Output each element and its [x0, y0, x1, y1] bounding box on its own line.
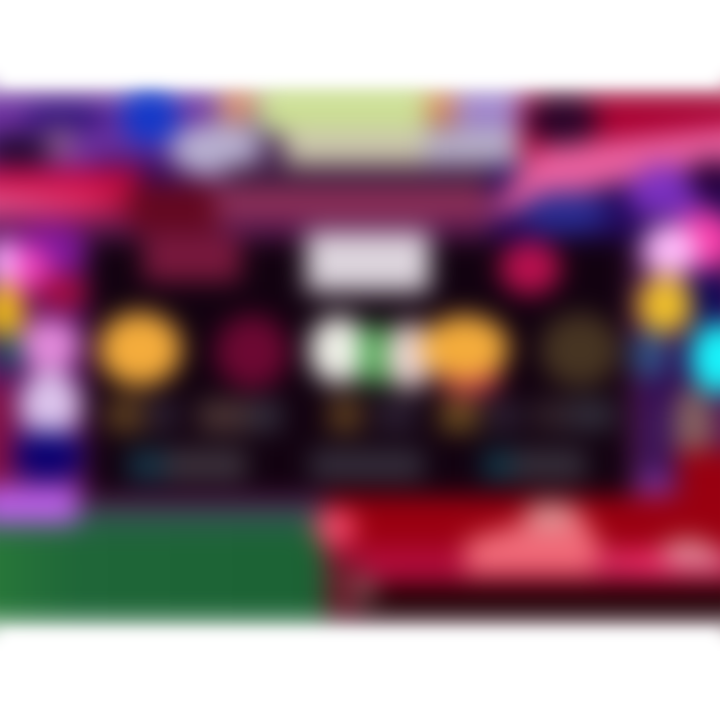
red footer panel — [313, 496, 720, 620]
top white margin — [0, 0, 720, 84]
title shadow band — [225, 166, 495, 186]
header band: centre maroon ribbon — [130, 183, 500, 233]
red footer lettering — [465, 502, 720, 574]
left glow panel — [0, 222, 88, 502]
blurred poster — [0, 86, 720, 622]
icon: maroon circle — [215, 315, 289, 389]
small labels row — [106, 398, 615, 432]
icon: orange circle 2 — [421, 315, 509, 397]
header band: right dark — [490, 94, 720, 245]
icon: white and green flag circle — [309, 316, 434, 390]
icon: blue balloon — [120, 86, 180, 146]
right glow panel — [521, 160, 720, 520]
heading 3: crimson mark — [499, 241, 561, 295]
dark main panel — [88, 232, 630, 496]
bottom white margin — [0, 632, 720, 720]
header band: left crimson ribbon — [0, 168, 140, 218]
icon: orange circle 1 — [98, 312, 182, 386]
header band: left purple — [0, 92, 230, 190]
purple tile — [0, 486, 78, 524]
heading 1 — [143, 236, 241, 282]
header band: green and lavender centre — [215, 86, 540, 179]
icon: olive circle — [540, 313, 620, 387]
heading 2: white — [306, 232, 430, 292]
pink diagonal ribbon — [485, 124, 720, 218]
green footer panel — [0, 508, 325, 622]
base — [0, 92, 720, 622]
title: blurred white lettering — [169, 123, 261, 177]
caption row — [128, 450, 586, 480]
